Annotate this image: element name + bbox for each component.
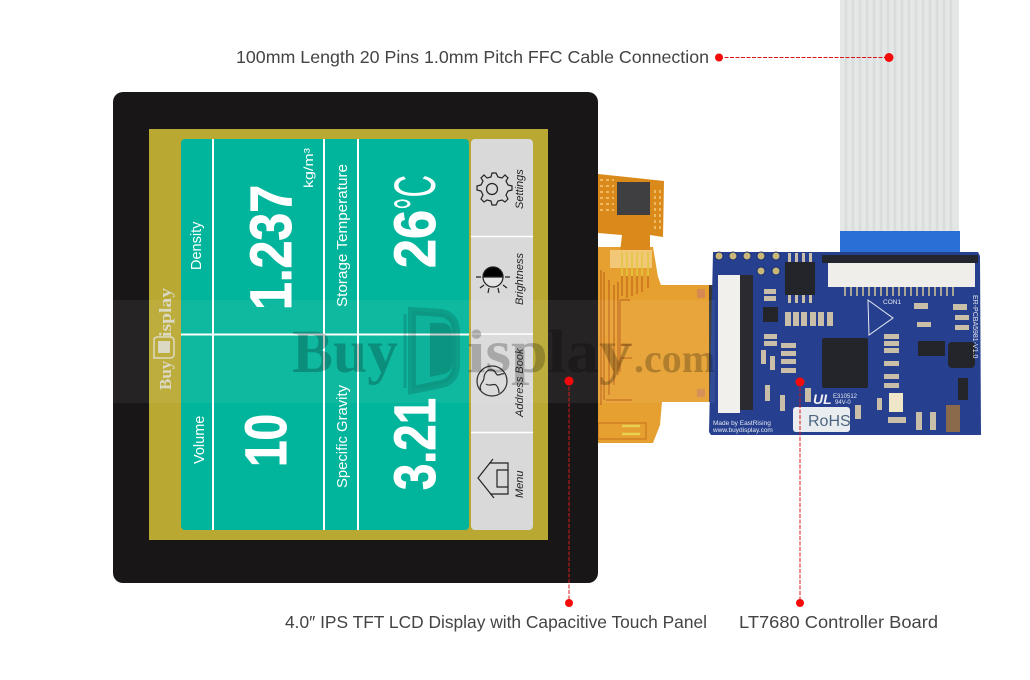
value: 1.237: 1.237 (239, 185, 304, 310)
BuyDisplay.com watermark: .com (634, 336, 715, 381)
vertical BuyDisplay logo: Buy (156, 360, 175, 390)
header pads JP1 (715, 252, 780, 275)
silkscreen: CON1: CON1 (883, 299, 901, 306)
watermark band (113, 300, 715, 403)
icon: settings gear (477, 173, 512, 205)
unit: kg/m3: kg/m³ (301, 147, 316, 188)
vertical BuyDisplay logo: isplay (156, 287, 175, 337)
icon: home (478, 459, 508, 498)
teal data panel (181, 139, 469, 530)
label: Storage Temperature: Storage Temperature (334, 164, 351, 307)
unit: °C: °C (383, 175, 448, 210)
RoHS label: RoHS (808, 413, 851, 430)
FFC connector top (822, 255, 978, 296)
silkscreen maker text: Made by EastRising (713, 420, 771, 427)
value: 3.21: 3.21 (383, 398, 448, 490)
FFC ribbon cable (840, 0, 960, 255)
label: Specific Gravity: Specific Gravity (334, 385, 351, 488)
BuyDisplay.com watermark: isplay (467, 319, 632, 386)
RoHS label (793, 407, 851, 432)
BuyDisplay.com watermark: Buy (292, 319, 398, 386)
icon: address book (477, 366, 507, 396)
callout: LCD display: 4.0″ IPS TFT LCD Display with Capacitive Touch Panel (285, 612, 707, 632)
callout: LCD display (285, 376, 707, 632)
silkscreen: board name: ER-PCBA5981-V1.0 (971, 295, 978, 359)
callout: controller board (739, 378, 938, 632)
silkscreen: UL number: E310512 (833, 394, 858, 400)
silkscreen: board rating: 94V-0 (835, 400, 851, 406)
flexible printed circuit (598, 174, 718, 443)
vertical BuyDisplay logo (154, 287, 175, 390)
chips (763, 262, 975, 400)
label: Settings: Settings (514, 169, 526, 209)
icon: brightness sun (476, 267, 510, 293)
FPC connector left (718, 275, 753, 413)
pins and passives (761, 253, 969, 432)
label: Brightness: Brightness (514, 253, 526, 305)
value: 26: 26 (383, 210, 448, 268)
label: Volume: Volume (192, 416, 208, 464)
label: Density: Density (189, 221, 205, 270)
callout: controller board: LT7680 Controller Board (739, 612, 938, 632)
silkscreen: UL mark: UL (813, 391, 832, 407)
value: 10: 10 (234, 414, 299, 467)
silkscreen web address: www.buydisplay.com (712, 427, 773, 434)
label: Menu: Menu (514, 470, 526, 498)
silkscreen: fan logo (868, 300, 893, 335)
grey menu panel (471, 139, 533, 530)
callout: FFC cable: 100mm Length 20 Pins 1.0mm Pitch FFC Cable Connection (236, 47, 709, 67)
label: Address Book: Address Book (514, 348, 526, 418)
controller board (709, 252, 981, 435)
LCD module bezel (113, 92, 598, 583)
olive screen background (149, 129, 548, 540)
BuyDisplay.com watermark (292, 311, 715, 390)
